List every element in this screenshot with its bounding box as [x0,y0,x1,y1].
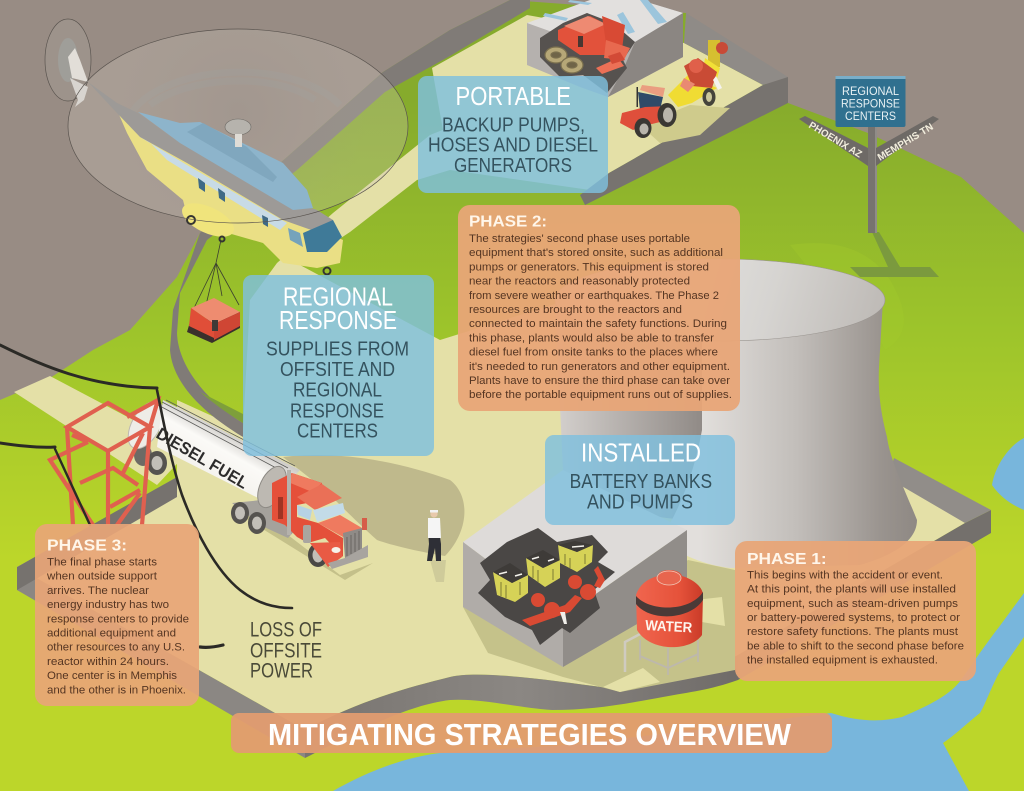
panel: phase 3: PHASE 3: [47,538,127,555]
engine cowl [187,123,277,182]
sign arm: Phoenix AZ [799,116,868,166]
tail rotor [45,19,91,107]
cutaway interior [478,528,615,645]
sign panel: CENTERS [845,109,896,123]
panel: regional response: OFFSITE AND [280,358,395,381]
icon: red pumps [522,566,605,626]
panel: phase 3: when outside support [46,571,157,583]
belly highlight [177,196,239,244]
panel: portable: HOSES AND DIESEL [428,134,598,157]
rotor disc outline [68,29,408,223]
panel: regional response: REGIONAL [283,282,393,312]
label: loss of offsite power: LOSS OF [250,619,322,642]
icon: batteries [493,541,593,602]
rear wheels of trailer [134,444,167,475]
panel: phase 3: other resources to any U.S. [47,642,185,654]
yellow fuselage belly [117,110,343,268]
panel: phase 3: additional equipment and [47,628,176,640]
panel: phase 2: diesel fuel from onsite tanks to the places where [469,347,718,359]
sign panel: REGIONAL [842,84,899,98]
panel: regional response: RESPONSE [290,399,384,422]
panel: regional response: REGIONAL [293,379,382,402]
label: loss of offsite power: POWER [250,660,313,683]
battery block: installed equipment bunker [463,470,687,667]
portable equipment building [527,0,683,97]
panel: phase 1: or battery-powered systems, to protect or [747,612,961,624]
landing gear [187,216,330,274]
panel: phase 2: near the reactors and reasonably protected [469,276,690,288]
steel transmission tower [50,400,158,525]
panel: phase 3: response centers to provide [47,613,189,625]
tank trailer: DIESEL FUEL [153,424,251,493]
helicopter with hanging generator [45,19,408,343]
sign panel: RESPONSE [841,96,900,110]
panel: phase 2: it's needed to run generators and other equipment. [469,361,730,373]
panel: portable: GENERATORS [454,154,572,177]
label: loss of offsite power [250,619,322,683]
road sign post: regional response centers [799,76,939,277]
panel: phase 2: The strategies' second phase uses portable [469,233,690,245]
panel: portable [418,76,608,193]
panel: phase 2: PHASE 2: [469,214,547,231]
panel: phase 1: equipment, such as steam-driven pumps [747,598,958,610]
panel: phase 2: from severe weather or earthquakes. The Phase 2 [469,290,719,302]
panel: phase 3: The final phase starts [47,556,157,568]
yellow trailer [668,40,728,107]
panel: phase 3: energy industry has two [47,599,169,611]
panel: installed: BATTERY BANKS [570,470,712,493]
title: MITIGATING STRATEGIES OVERVIEW [268,717,792,752]
panel: phase 1: At this point, the plants will use installed [747,584,956,596]
panel: phase 1 [735,541,976,681]
panel: phase 1: This begins with the accident or event. [747,569,943,581]
icon: hose coils [545,47,583,73]
panel: phase 2: resources are brought to the reactors and [469,304,682,316]
cooling tower [555,259,917,568]
sling load lines [194,240,239,308]
fifth wheel silver cap [252,462,292,512]
pale stripe [123,115,287,230]
panel: phase 2 [458,205,740,411]
sign arm: Phoenix AZ: PHOENIX AZ [806,120,864,160]
panel: phase 3: reactor within 24 hours. [47,656,169,668]
ground shadows [232,455,735,692]
panel: phase 2: this phase, plants would also be able to transfer [469,332,715,344]
panel: phase 3 [35,524,199,706]
panel: installed: INSTALLED [581,438,701,468]
panel: regional response: CENTERS [297,420,378,443]
panel: phase 2: connected to maintain the safety functions. During [469,318,727,330]
panel: regional response: SUPPLIES FROM [266,338,409,360]
tank trailer [121,395,300,503]
panel: regional response [243,275,434,456]
panel: phase 2: Plants have to ensure the third phase can take over [469,375,731,387]
windows and cockpit [198,178,342,252]
bunker faces [463,470,687,617]
diesel fuel truck [121,395,368,569]
tractor [620,85,676,138]
panel: phase 2: pumps or generators. This equipment is stored [469,261,709,273]
panel: phase 2: before the portable equipment runs out of supplies. [469,389,732,401]
panel: phase 1: the installed equipment is exhausted. [747,655,938,667]
panel: phase 1: be able to shift to the second phase before [747,640,964,652]
grey upper spine [88,82,333,232]
icon: hanging red generator [187,298,240,343]
panel: phase 2: equipment that's stored onsite, such as additional [469,247,723,259]
panel: phase 3: and the other is in Phoenix. [47,684,186,696]
rotor blur rings [130,72,340,115]
water tank [625,570,703,675]
label: loss of offsite power: OFFSITE [250,639,322,662]
panel: installed: AND PUMPS [587,491,693,514]
sign panel [836,76,906,127]
security guard [427,510,441,561]
red cab [272,470,368,569]
river [333,438,1024,791]
red tractor and yellow pump trailer [620,40,730,143]
blue upper fuselage [138,112,313,210]
panel: phase 3: arrives. The nuclear [47,585,150,597]
sign arm: Memphis TN: MEMPHIS TN [876,122,936,164]
power lines cut: loss of offsite power [0,345,292,647]
rotor disc [68,29,408,223]
rotor hub [225,119,251,147]
icon: red generators in building [558,16,630,74]
panel: portable: PORTABLE [456,81,571,111]
panel: phase 1: PHASE 1: [747,551,827,568]
panel: installed [545,435,735,525]
panel: regional response: RESPONSE [279,305,397,335]
panel: phase 3: One center is in Memphis [47,670,177,682]
panel: portable: BACKUP PUMPS, [442,114,585,137]
water tank: WATER [645,618,693,636]
trailer bed and drive wheels [231,500,300,538]
panel: phase 1: restore safety functions. The plants must [747,626,958,638]
